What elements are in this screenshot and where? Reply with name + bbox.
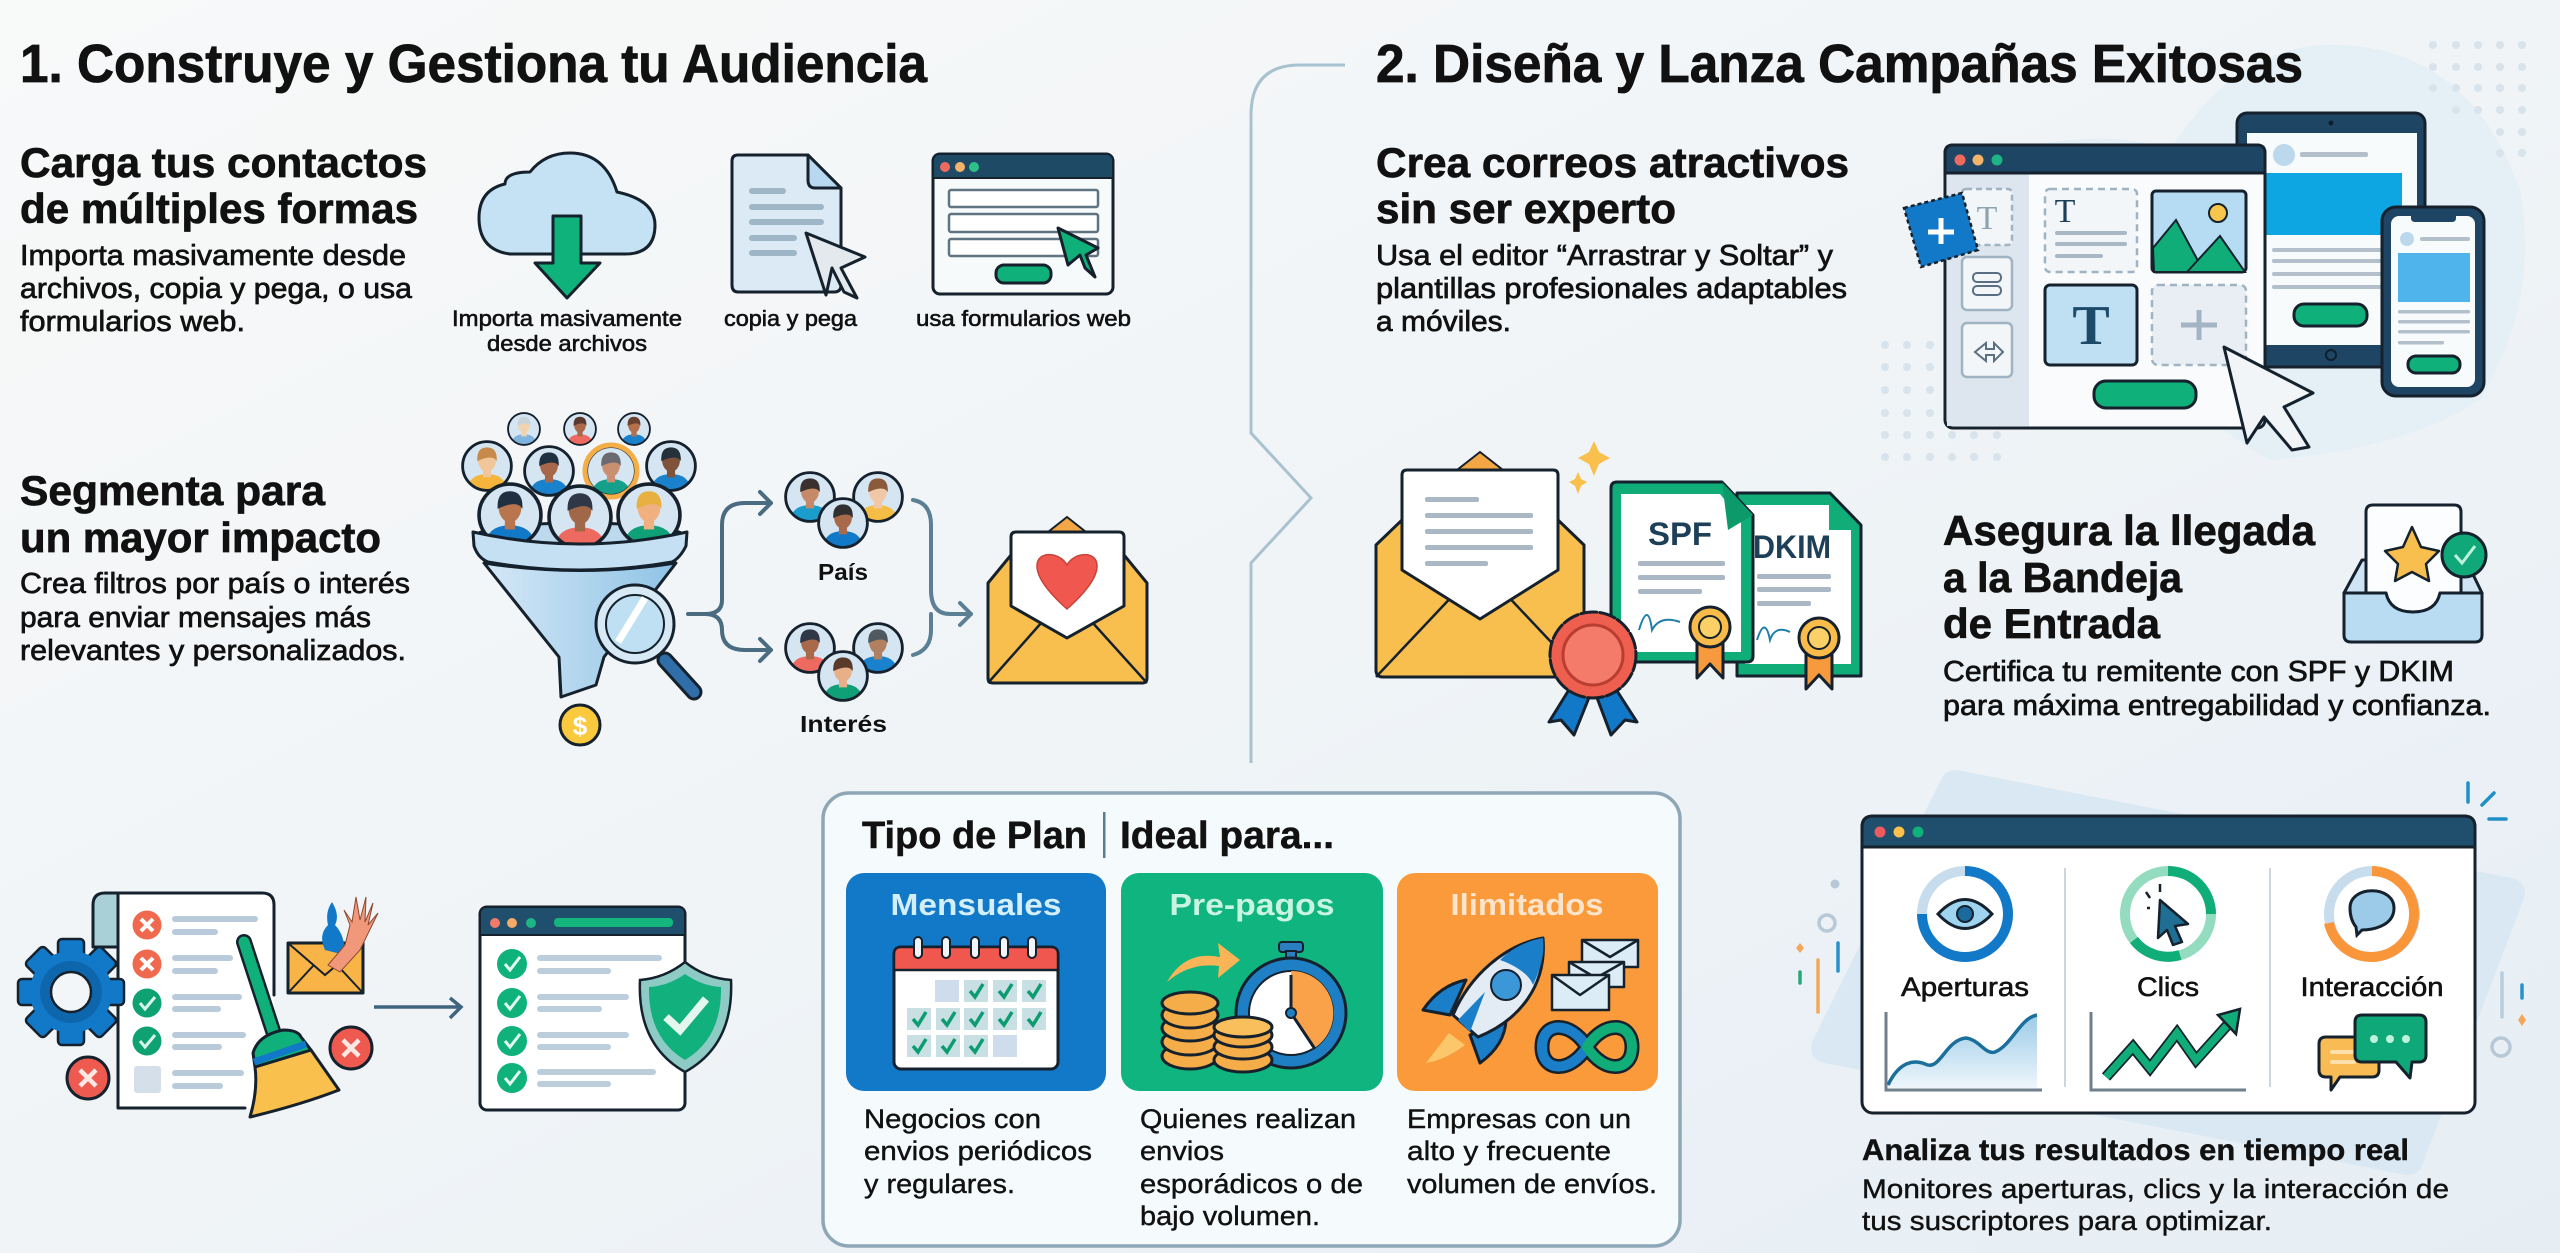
icon: document and cursor xyxy=(732,155,865,298)
icon: calendar xyxy=(894,937,1058,1069)
heading: Analiza tus resultados en tiempo real xyxy=(1862,1134,2409,1167)
heading: Carga tus contactos xyxy=(20,139,427,186)
text block: analiza resultados xyxy=(1862,1134,2449,1236)
icon: rocket xyxy=(1423,938,1543,1063)
text block: asegura la llegada xyxy=(1943,507,2491,722)
metric: aperturas: Aperturas xyxy=(1901,972,2029,1002)
tablet xyxy=(2237,113,2425,367)
DKIM certificate: DKIM xyxy=(1753,529,1831,565)
description xyxy=(20,568,410,667)
coin xyxy=(560,705,600,745)
card: ilimitados xyxy=(1397,873,1658,1091)
description: formularios web. xyxy=(20,306,245,338)
section 2 title: 2. Diseña y Lanza Campañas Exitosas xyxy=(1376,34,2303,94)
description: Monitores aperturas, clics y la interacción de xyxy=(1862,1174,2449,1204)
broom xyxy=(244,942,339,1117)
card: pre-pagos: Pre-pagos xyxy=(1170,887,1334,922)
connector line between sections xyxy=(1251,65,1345,763)
dragged block xyxy=(1904,193,1978,267)
heading: sin ser experto xyxy=(1376,185,1676,232)
metric: interacción xyxy=(2300,871,2444,1002)
panel heading xyxy=(862,812,1334,858)
column text: pre-pagos: bajo volumen. xyxy=(1140,1201,1320,1231)
description: Usa el editor “Arrastrar y Soltar” y xyxy=(1376,240,1834,272)
column text: pre-pagos: Quienes realizan xyxy=(1140,1104,1356,1134)
metric: aperturas xyxy=(1901,871,2029,1002)
heading xyxy=(20,139,427,232)
background blob behind devices xyxy=(2030,45,2525,460)
DKIM certificate xyxy=(1737,493,1861,676)
heading: Asegura la llegada xyxy=(1943,507,2316,554)
text block: segmenta xyxy=(20,467,410,667)
icon: arrow xyxy=(1167,943,1240,982)
icon: infinity xyxy=(1542,1027,1632,1067)
plus tile xyxy=(2152,285,2246,365)
editor window: T xyxy=(2072,295,2110,357)
group: interés avatars xyxy=(786,624,902,702)
decorative dots xyxy=(1881,41,2526,461)
description xyxy=(1862,1174,2449,1236)
column text: mensuales xyxy=(864,1104,1092,1199)
column text: mensuales: Negocios con xyxy=(864,1104,1041,1134)
icon: responsive editor on devices xyxy=(1904,113,2484,450)
sparkles xyxy=(1569,441,1610,494)
column text: ilimitados: volumen de envíos. xyxy=(1407,1169,1657,1199)
column text: pre-pagos: esporádicos o de xyxy=(1140,1169,1363,1199)
label: importa masivamente: Importa masivamente xyxy=(452,306,682,331)
card: pre-pagos xyxy=(1121,873,1383,1091)
column text: mensuales: envios periódicos xyxy=(864,1136,1092,1166)
heading: de múltiples formas xyxy=(20,185,418,232)
sidebar items xyxy=(1962,189,2012,377)
group: país avatars xyxy=(786,473,902,549)
column text: pre-pagos: envios xyxy=(1140,1136,1224,1166)
plan table panel xyxy=(823,793,1680,1246)
description: Certifica tu remitente con SPF y DKIM xyxy=(1943,656,2454,688)
SPF certificate: SPF xyxy=(1648,516,1712,552)
heading: Crea correos atractivos xyxy=(1376,139,1849,186)
section 1 title: 1. Construye y Gestiona tu Audiencia xyxy=(20,34,928,94)
arrow: clean list xyxy=(374,998,461,1018)
heading xyxy=(1376,139,1849,232)
icon: audience funnel with magnifier xyxy=(463,413,695,745)
icon: list cleaning with gear and broom xyxy=(18,893,378,1117)
chart: aperturas trend xyxy=(1886,1012,2042,1090)
icon: speech bubbles xyxy=(2319,1015,2426,1090)
heading xyxy=(1943,507,2316,647)
heading: a la Bandeja xyxy=(1943,554,2183,601)
seal xyxy=(1549,612,1637,735)
metric: clics xyxy=(2125,871,2211,1002)
description: a móviles. xyxy=(1376,306,1511,338)
icon: verified list window with shield xyxy=(480,907,731,1110)
text block tile xyxy=(2045,285,2137,365)
editor window: T xyxy=(1977,200,1998,237)
analytics dashboard window xyxy=(1862,816,2475,1113)
description xyxy=(20,240,413,338)
column text: mensuales: y regulares. xyxy=(864,1169,1015,1199)
list lines xyxy=(172,916,258,1089)
icon: SPF and DKIM certificates xyxy=(1549,482,1861,735)
arrows: split to segments and merge xyxy=(688,492,971,661)
column text: ilimitados: alto y frecuente xyxy=(1407,1136,1611,1166)
error marks xyxy=(67,1027,372,1099)
description: plantillas profesionales adaptables xyxy=(1376,273,1847,305)
text block: carga tus contactos xyxy=(20,139,427,338)
label: país: País xyxy=(818,559,868,585)
column text: ilimitados xyxy=(1407,1104,1657,1199)
card: mensuales xyxy=(846,873,1106,1091)
icon: envelopes xyxy=(1552,940,1638,1010)
description: relevantes y personalizados. xyxy=(20,635,406,667)
icon: envelope with letter and seal xyxy=(1376,441,1610,677)
icon: coins xyxy=(1162,992,1272,1072)
description: archivos, copia y pega, o usa xyxy=(20,273,413,305)
gear xyxy=(18,939,124,1045)
description: Importa masivamente desde xyxy=(20,240,406,272)
panel heading: Ideal para... xyxy=(1120,815,1334,857)
icon: stopwatch xyxy=(1236,942,1346,1068)
background tilted card xyxy=(1826,785,2510,1160)
decorative marks around dashboard xyxy=(1796,783,2526,1056)
description xyxy=(1376,240,1847,338)
icon: envelope with heart xyxy=(988,517,1147,683)
cursor xyxy=(2224,347,2313,450)
card: ilimitados: Ilimitados xyxy=(1450,887,1604,922)
text block: crea correos xyxy=(1376,139,1849,338)
column text: ilimitados: Empresas con un xyxy=(1407,1104,1631,1134)
icon: inbox with star and check xyxy=(2344,505,2486,642)
phone xyxy=(2382,207,2484,396)
green button xyxy=(2094,381,2196,408)
medals xyxy=(1690,607,1839,689)
dashed text block xyxy=(2045,189,2137,272)
description: para enviar mensajes más xyxy=(20,602,371,634)
envelope and hand xyxy=(288,897,378,993)
status marks xyxy=(132,910,162,1093)
card: mensuales: Mensuales xyxy=(890,887,1062,922)
label: copia y pega: copia y pega xyxy=(724,306,858,331)
shield xyxy=(640,962,731,1072)
heading: de Entrada xyxy=(1943,600,2161,647)
editor window xyxy=(1945,145,2265,428)
SPF certificate xyxy=(1611,482,1753,662)
description: tus suscriptores para optimizar. xyxy=(1862,1206,2272,1236)
metric: clics: Clics xyxy=(2137,972,2199,1002)
label: importa masivamente: desde archivos xyxy=(487,331,647,356)
coin: $ xyxy=(573,711,588,741)
heading: Segmenta para xyxy=(20,467,326,514)
heading: un mayor impacto xyxy=(20,514,381,561)
metric: interacción: Interacción xyxy=(2300,972,2444,1002)
chart: clics trend xyxy=(2091,1009,2246,1090)
heading xyxy=(20,467,381,561)
column text: pre-pagos xyxy=(1140,1104,1363,1231)
label: usa formularios web: usa formularios web xyxy=(916,306,1131,331)
icon: cloud upload with green arrow xyxy=(479,153,655,298)
panel heading: Tipo de Plan xyxy=(862,815,1087,857)
description: para máxima entregabilidad y confianza. xyxy=(1943,690,2491,722)
description: Crea filtros por país o interés xyxy=(20,568,410,600)
editor window: T xyxy=(2055,193,2076,230)
image block xyxy=(2152,191,2246,272)
label: interés: Interés xyxy=(800,711,887,737)
description xyxy=(1943,656,2491,722)
icon: web form xyxy=(933,154,1113,294)
